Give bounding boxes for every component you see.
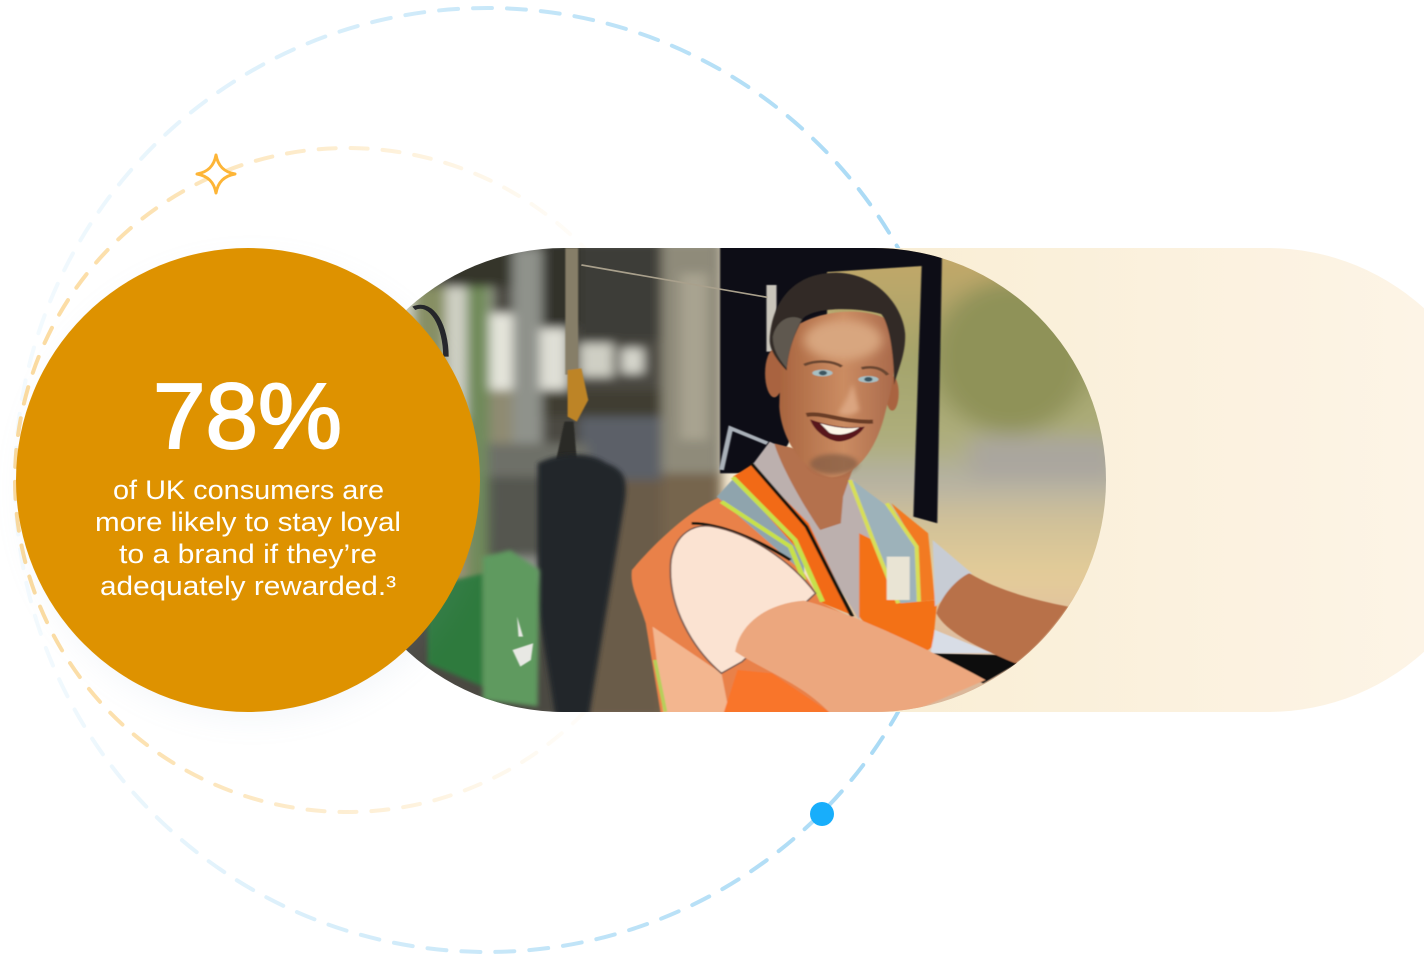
- driver: face: [779, 312, 896, 477]
- photo: blurred outdoor scene: [804, 248, 1106, 712]
- driver: black vest edge: [692, 463, 852, 617]
- driver: mouth: [810, 419, 865, 441]
- cream pill background: [500, 248, 1424, 712]
- driver: vest right panel: [859, 533, 937, 653]
- large dashed blue orbit: [15, 8, 959, 952]
- photo: white ticket-box decal: [513, 617, 533, 667]
- driver: vest strap left: [733, 465, 852, 615]
- driver: vest lower orange: [723, 670, 828, 712]
- photo: hanging pole and yellow grip: [556, 248, 588, 460]
- driver: vest lower highlight: [652, 626, 728, 712]
- photo background: blurred bus interior: [406, 248, 730, 712]
- driver: head: [765, 273, 905, 477]
- driver: lower lime stripe: [655, 660, 665, 712]
- driver: steering area: [930, 630, 992, 653]
- driver: goatee stubble: [810, 454, 858, 474]
- photo: driver figure: [632, 442, 1068, 727]
- driver: vest mesh right shoulder: [852, 480, 919, 603]
- driver: teeth: [820, 423, 859, 435]
- driver: nose: [839, 383, 859, 415]
- driver: far forearm: [936, 573, 1068, 663]
- driver: vest left body: [630, 498, 842, 712]
- photo: handrail: [581, 265, 767, 297]
- driver: forehead highlight: [804, 320, 882, 360]
- driver: vest right side: [891, 503, 935, 602]
- photo: dark door frame and pillar: [720, 240, 942, 523]
- driver: moustache: [806, 414, 873, 422]
- icon: blue dot: [810, 802, 834, 826]
- driver: shirt pocket highlight: [887, 557, 910, 600]
- stat description: more likely to stay loyal: [95, 507, 401, 537]
- driver: white sleeve: [670, 526, 816, 673]
- photo: dashboard display: [721, 428, 767, 470]
- orange stat circle: [16, 248, 480, 712]
- orange circle shadow: [24, 262, 480, 718]
- driver: dash: [928, 653, 1018, 683]
- stat description: [95, 475, 401, 601]
- small dashed orange orbit: [15, 148, 679, 812]
- driver: ears: [765, 349, 783, 397]
- driver: shirt chest: [754, 442, 871, 620]
- driver: grey temple: [773, 317, 802, 368]
- driver: right reflective stripe: [850, 480, 919, 603]
- stat description: of UK consumers are: [113, 475, 384, 505]
- photo: pale strip beside head: [766, 285, 777, 352]
- driver: eyes: [812, 370, 833, 376]
- photo: mirror arc: [414, 307, 446, 357]
- photo: smiling bus driver in orange vest: [308, 240, 1227, 727]
- stat description: to a brand if they’re: [119, 539, 377, 569]
- driver: pupils: [819, 371, 827, 375]
- icon: sparkle star: [197, 155, 235, 193]
- photo: driver seat: [538, 455, 626, 720]
- driver: hair: [770, 273, 905, 385]
- driver: reflective stripes: [721, 477, 822, 602]
- stat description: adequately rewarded.³: [100, 571, 396, 601]
- stat: 78%: 78%: [153, 364, 342, 468]
- photo: green ticket box: [428, 550, 540, 707]
- driver: right sleeve: [933, 540, 972, 607]
- driver: vest mesh left shoulder: [717, 477, 804, 573]
- driver: neck: [774, 443, 855, 530]
- driver: near arm: [734, 600, 986, 712]
- driver: eyebrows: [804, 362, 888, 375]
